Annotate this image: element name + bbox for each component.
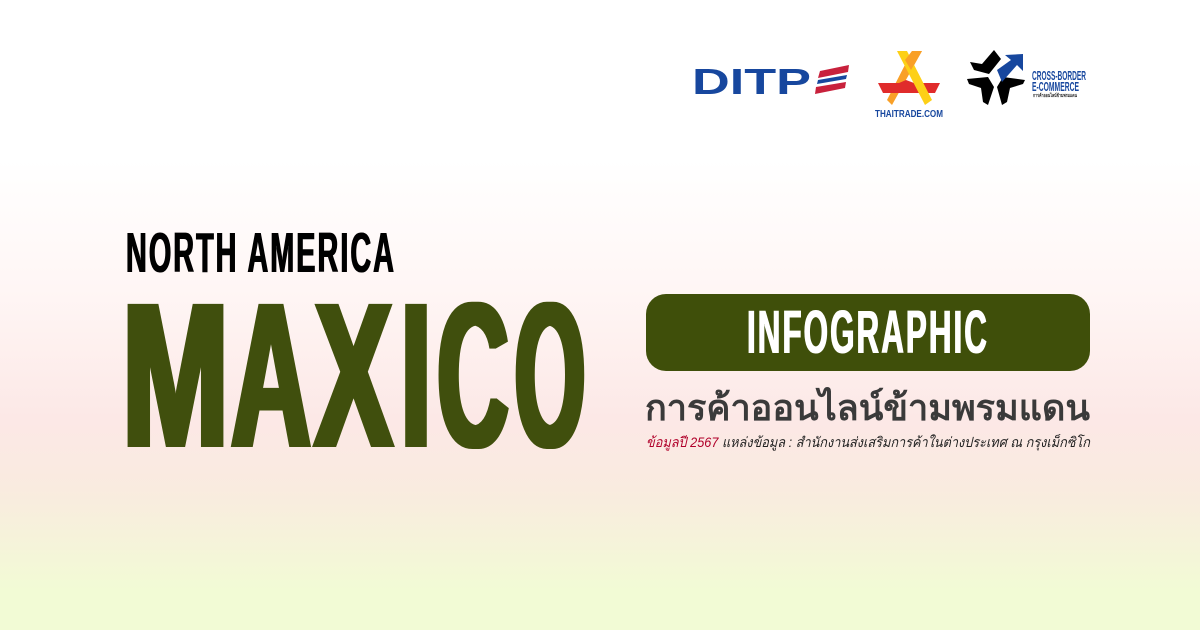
heading: country: I: [401, 260, 431, 492]
logo: Cross-border e-commerce: การค้าออนไลน์ข้ามพรมแดน: [1033, 92, 1077, 99]
logo: Cross-border e-commerce: [967, 50, 1086, 105]
heading: country: C: [438, 260, 508, 492]
logo: Thaitrade: [875, 51, 943, 120]
heading: country: M: [122, 260, 229, 492]
text: O: [515, 260, 585, 492]
logo: Thaitrade: THAITRADE.COM: [875, 109, 943, 120]
heading: country: X: [314, 260, 393, 492]
subtitle: Thai: การค้าออนไลน์ข้ามพรมแดน: [645, 386, 1090, 428]
source note: ข้อมูลปี 2567 แหล่งข้อมูล : สำนักงานส่งเสริมการค้าในต่างประเทศ ณ กรุงเม็กซิโก: [646, 434, 1091, 451]
badge: infographic: [646, 294, 1090, 371]
logo: DITP: DITP: [692, 61, 811, 102]
heading: region: NORTH AMERICA: [126, 221, 396, 285]
logo: DITP: [692, 61, 849, 102]
heading: country: A: [231, 260, 311, 492]
logo: Cross-border e-commerce: E-COMMERCE: [1032, 80, 1079, 94]
logo: Cross-border e-commerce: CROSS-BORDER: [1032, 69, 1086, 83]
